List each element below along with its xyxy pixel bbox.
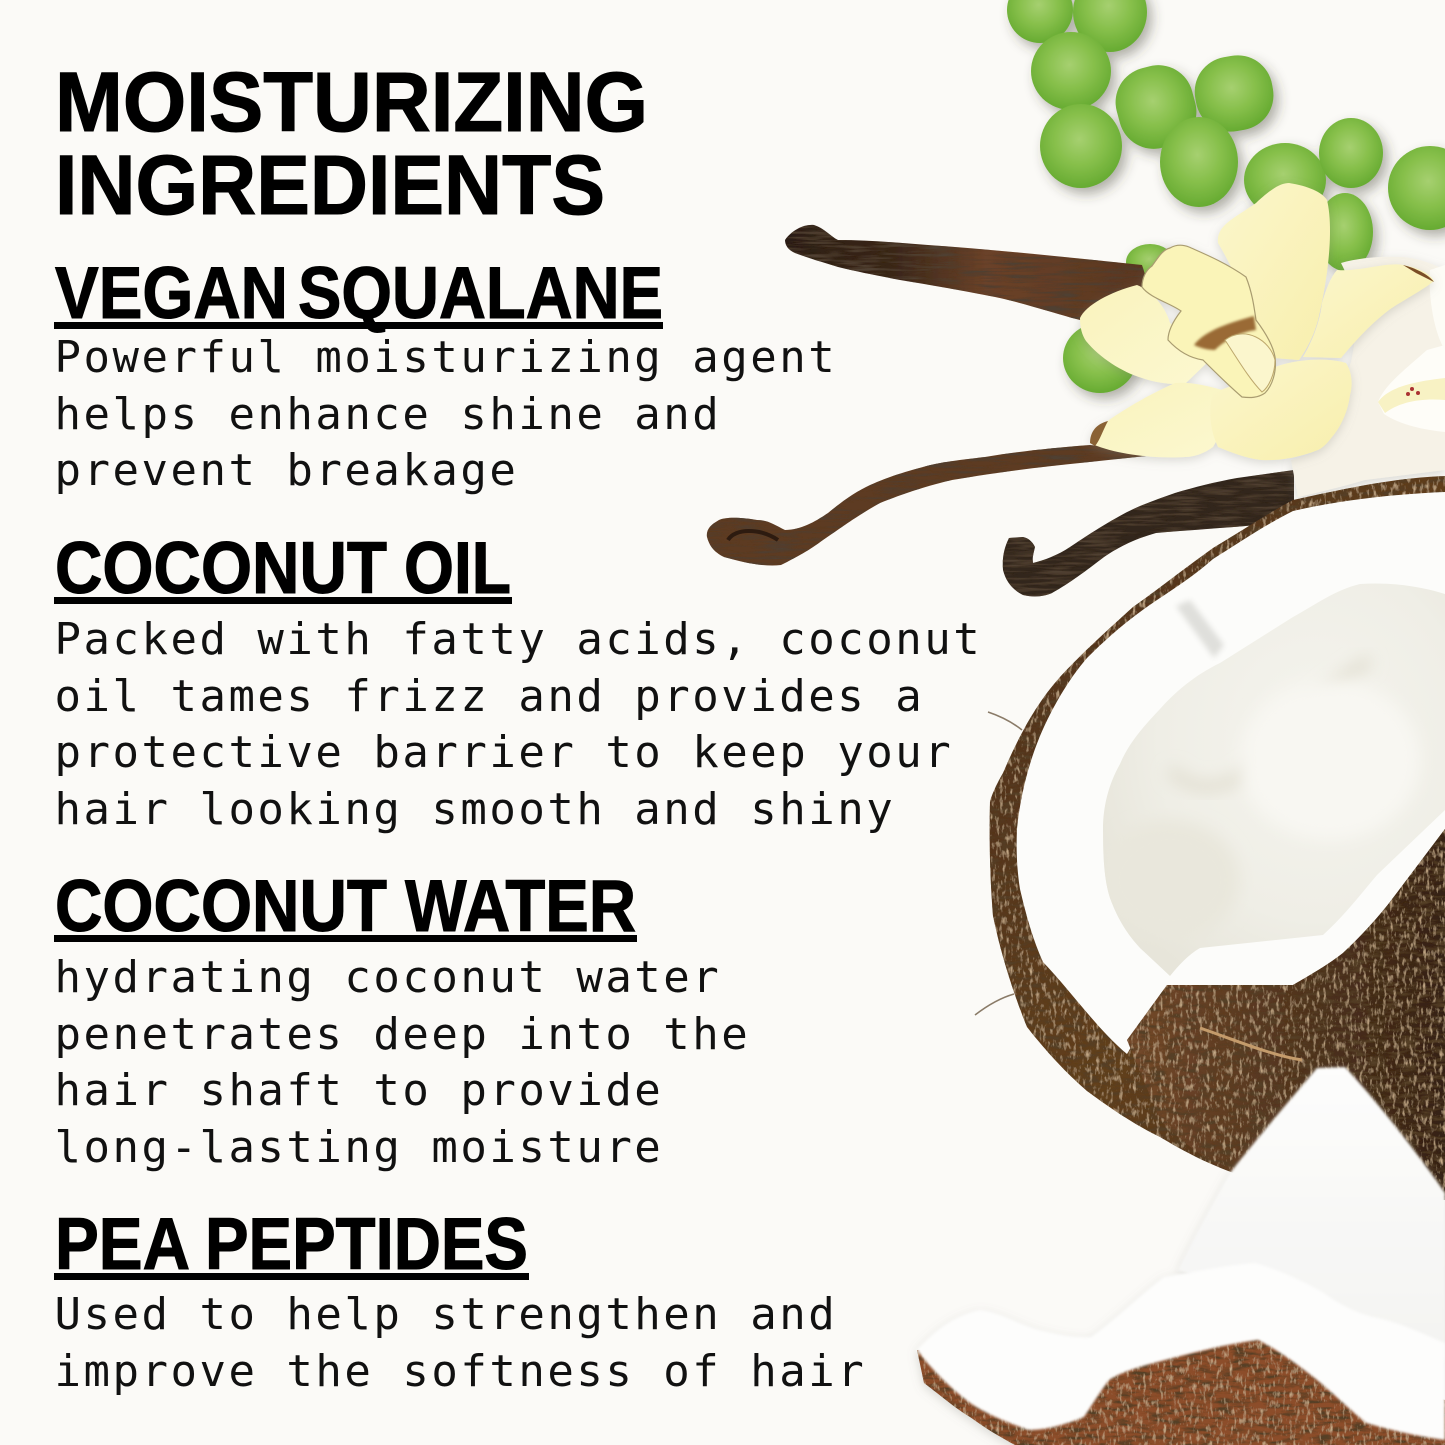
heading: pea peptides: PEPTIDES bbox=[205, 1204, 528, 1285]
text: vegan squalane description: Powerful moisturizing agent bbox=[54, 332, 837, 383]
text: coconut water description: hair shaft to provide bbox=[54, 1065, 663, 1116]
heading: coconut water bbox=[54, 866, 637, 947]
icon: vanilla flower bbox=[1080, 183, 1434, 460]
section: vegan squalane bbox=[54, 253, 837, 496]
heading: vegan squalane bbox=[54, 253, 663, 334]
section: coconut oil bbox=[54, 528, 982, 835]
heading: vegan squalane: VEGAN bbox=[55, 253, 288, 334]
text: coconut oil description: Packed with fatty acids, coconut bbox=[54, 614, 982, 665]
icon: green peas bbox=[1007, 0, 1445, 393]
heading: coconut water: WATER bbox=[405, 866, 636, 947]
flower throat markings bbox=[1194, 316, 1256, 350]
petal: center lip bbox=[1142, 245, 1275, 398]
title: INGREDIENTS bbox=[55, 138, 605, 232]
heading: vegan squalane: SQUALANE bbox=[298, 253, 663, 334]
petal: inner lip bbox=[1225, 334, 1275, 392]
vanilla pod: middle bbox=[707, 445, 1175, 566]
coconut piece: front flesh bbox=[917, 1263, 1445, 1440]
coconut wall shadow bbox=[1176, 600, 1224, 658]
icon: white orchid behind bbox=[1291, 257, 1445, 497]
title: MOISTURIZING bbox=[55, 55, 648, 149]
coconut inner cavity bbox=[1100, 583, 1445, 976]
coconut piece: brown shell bbox=[917, 1335, 1445, 1445]
text: coconut water description: long-lasting moisture bbox=[54, 1122, 663, 1173]
coconut piece: back flesh bbox=[1178, 1067, 1445, 1360]
heading: coconut oil: OIL bbox=[404, 528, 511, 609]
text: coconut oil description bbox=[54, 614, 982, 835]
text: coconut water description: hydrating coconut water bbox=[54, 952, 721, 1003]
text: pea peptides description: improve the softness of hair bbox=[54, 1346, 866, 1397]
coconut rear hairs bbox=[975, 712, 1302, 1060]
text: vegan squalane description: helps enhance shine and bbox=[54, 389, 721, 440]
petal: bottom right bbox=[1210, 360, 1352, 460]
vanilla pod: curl detail bbox=[728, 531, 778, 540]
coconut shell bbox=[990, 476, 1445, 1180]
section: pea peptides bbox=[54, 1204, 866, 1397]
heading: coconut water: COCONUT bbox=[55, 866, 387, 947]
text: pea peptides description bbox=[54, 1289, 866, 1397]
coconut broken shell bbox=[1127, 829, 1445, 1200]
title bbox=[55, 55, 648, 232]
icon: coconut piece bbox=[917, 1067, 1445, 1445]
heading: pea peptides: PEA bbox=[55, 1204, 190, 1285]
icon: coconut half bbox=[975, 476, 1445, 1200]
petal: left bbox=[1080, 285, 1213, 384]
text: vegan squalane description: prevent breakage bbox=[54, 445, 518, 496]
text: coconut oil description: hair looking smooth and shiny bbox=[54, 784, 895, 835]
text: vegan squalane description bbox=[54, 332, 837, 496]
icon: vanilla pods bbox=[707, 225, 1294, 596]
section: coconut water bbox=[54, 866, 750, 1173]
text: coconut oil description: protective barrier to keep your bbox=[54, 727, 953, 778]
heading: coconut oil: COCONUT bbox=[55, 528, 387, 609]
heading: pea peptides bbox=[54, 1204, 529, 1285]
coconut flesh bbox=[1017, 492, 1445, 1054]
petal: top bbox=[1218, 183, 1330, 360]
vanilla pod: upper bbox=[785, 225, 1150, 320]
text: coconut oil description: oil tames frizz and provides a bbox=[54, 671, 924, 722]
text: coconut water description bbox=[54, 952, 750, 1173]
petal: right bbox=[1303, 264, 1434, 358]
text: pea peptides description: Used to help strengthen and bbox=[54, 1289, 837, 1340]
petal: bottom left bbox=[1090, 383, 1242, 457]
text: coconut water description: penetrates deep into the bbox=[54, 1009, 750, 1060]
vanilla pod: lower bbox=[1003, 470, 1294, 596]
